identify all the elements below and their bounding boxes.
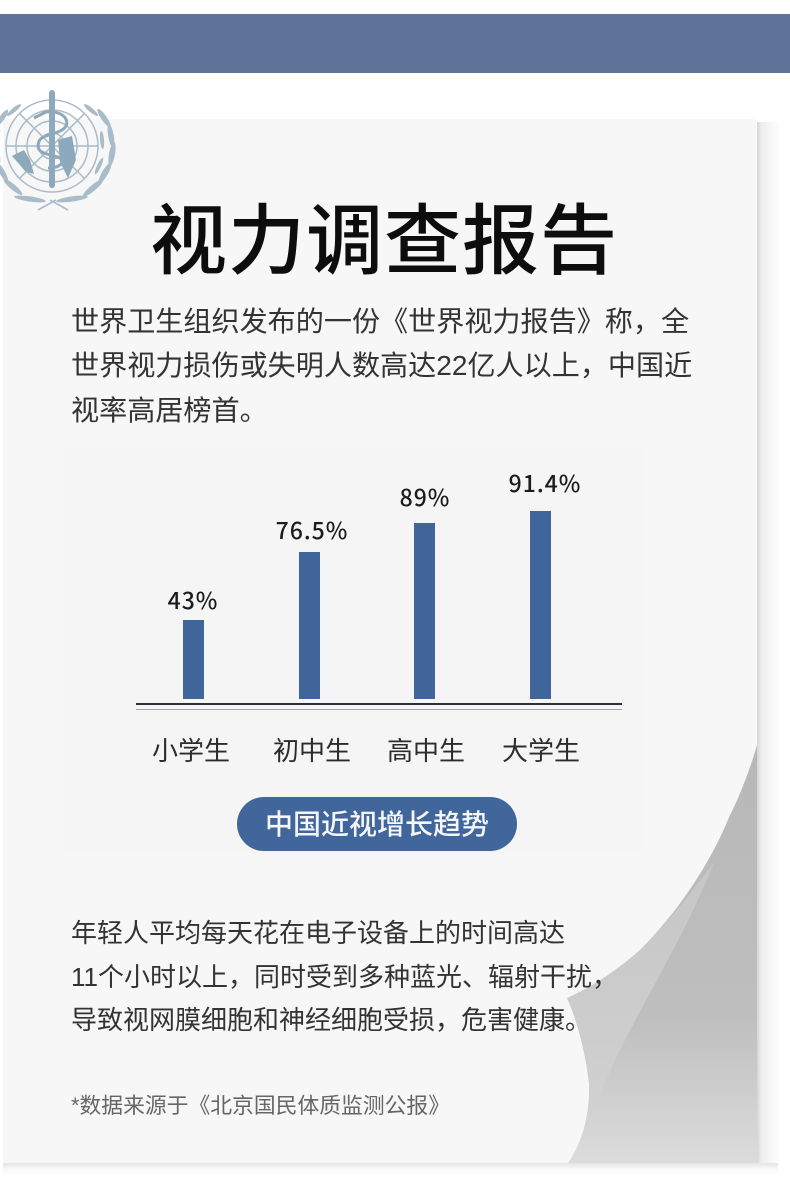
bar chart: [64, 445, 641, 853]
label: 小学生: 小学生: [152, 736, 230, 766]
intro text: [71, 306, 692, 426]
curl fold highlight: [567, 862, 714, 1117]
label: 高中生: 高中生: [387, 736, 465, 766]
value: 小学生: 43%: [168, 582, 218, 616]
value: 初中生: 76.5%: [276, 512, 348, 546]
label: 大学生: 大学生: [502, 736, 580, 766]
body text: 11个小时以上，同时受到多种蓝光、辐射干扰，: [71, 962, 618, 992]
intro text: 世界视力损伤或失明人数高达22亿人以上，中国近: [71, 350, 692, 381]
bar: 小学生: [183, 620, 204, 699]
intro text: 视率高居榜首。: [71, 395, 268, 426]
body text: 导致视网膜细胞和神经细胞受损，危害健康。: [71, 1005, 591, 1035]
source note: *数据来源于《北京国民体质监测公报》: [71, 1093, 450, 1118]
label: 初中生: 初中生: [273, 736, 351, 766]
curl underside: [567, 745, 757, 1163]
chart caption pill: 中国近视增长趋势: [265, 809, 489, 840]
bar: 高中生: [414, 523, 435, 699]
value: 高中生: 89%: [400, 479, 450, 513]
icon: WHO emblem: [0, 90, 116, 211]
intro text: 世界卫生组织发布的一份《世界视力报告》称，全: [71, 306, 689, 337]
body text: [71, 918, 618, 1035]
chart caption pill: [237, 797, 517, 851]
bar: 初中生: [299, 552, 320, 699]
title: 视力调查报告: [150, 199, 618, 285]
bar: 大学生: [530, 511, 551, 699]
top banner: [0, 14, 790, 73]
value: 大学生: 91.4%: [509, 465, 581, 499]
body text: 年轻人平均每天花在电子设备上的时间高达: [71, 918, 565, 948]
